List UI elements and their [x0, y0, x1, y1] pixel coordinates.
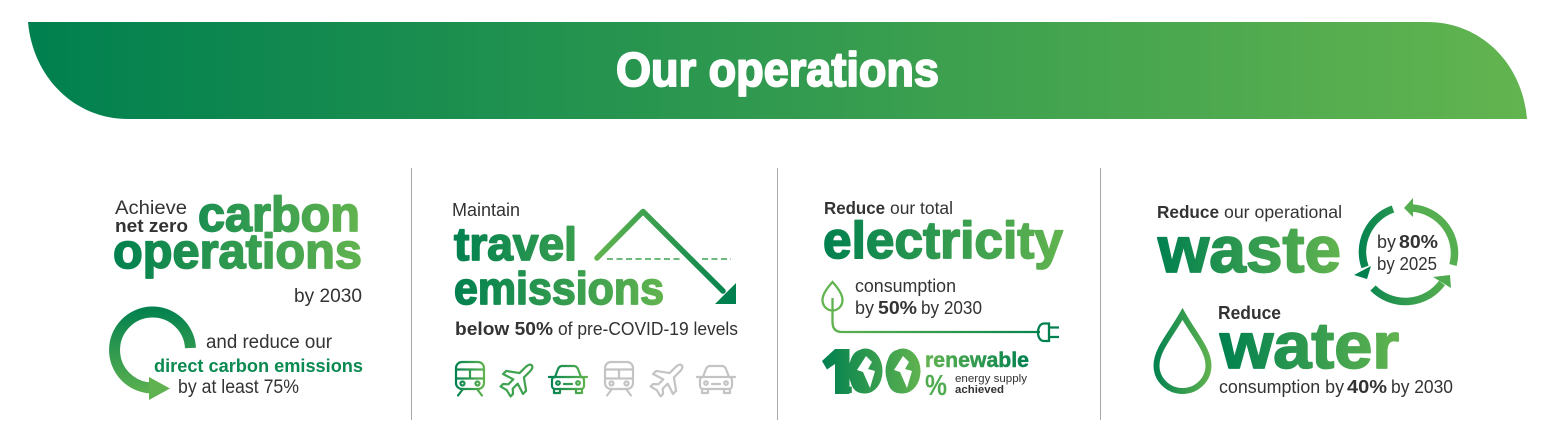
water consumption text: 40%	[1347, 376, 1387, 397]
water heading: water	[1219, 309, 1399, 382]
reduce label	[824, 198, 953, 218]
icon: plane grey	[646, 355, 692, 401]
icon: recycling arrows	[1354, 198, 1455, 302]
reduction text: by at least 75%	[178, 377, 299, 398]
percent sign: %	[925, 370, 947, 402]
reduce water label: Reduce	[1218, 303, 1281, 323]
icon: falling line arrow	[597, 212, 736, 304]
net zero label: net zero	[115, 216, 188, 236]
reduce label: our total	[890, 198, 953, 218]
header banner	[28, 22, 1527, 119]
reduction text	[154, 332, 363, 398]
energy supply text: energy supply	[955, 373, 1028, 385]
electricity heading: electricity	[823, 212, 1063, 270]
renewable label: renewable	[925, 348, 1029, 372]
reduction text: and reduce our	[206, 332, 333, 353]
title: Our operations	[616, 43, 939, 96]
icon: circular arrow	[115, 312, 190, 400]
below 50% text: below 50%	[455, 318, 553, 339]
reduction text: direct carbon emissions	[154, 355, 363, 376]
banner shape	[28, 22, 1527, 119]
icon: car grey	[697, 366, 735, 393]
energy supply text: achieved	[955, 384, 1004, 396]
travel heading: travel	[454, 218, 577, 270]
consumption text: by 2030	[921, 297, 982, 318]
consumption text: by	[855, 297, 875, 318]
water consumption text	[1219, 376, 1453, 397]
by 80% by 2025	[1377, 231, 1438, 274]
panel: carbon operations	[113, 187, 363, 400]
panel: waste and water	[1156, 198, 1455, 397]
by 80% by 2025: by	[1377, 231, 1397, 252]
carbon heading: carbon	[198, 187, 360, 242]
below 50% text: of pre-COVID-19 levels	[558, 318, 738, 339]
reduce waste label: Reduce	[1157, 202, 1219, 222]
emissions heading: emissions	[454, 263, 664, 314]
operations heading: operations	[113, 224, 362, 279]
reduce waste label: our operational	[1224, 202, 1342, 222]
maintain label: Maintain	[452, 200, 520, 220]
icon: water drop	[1156, 314, 1208, 391]
icon: car green	[549, 366, 587, 393]
water consumption text: consumption by	[1219, 376, 1345, 397]
consumption text	[855, 275, 982, 318]
100 percent figure: 100	[819, 338, 918, 407]
icon: plane green	[496, 355, 542, 401]
by 80% by 2025: by 2025	[1377, 253, 1437, 274]
reduce label: Reduce	[824, 198, 885, 218]
reduce waste label	[1157, 202, 1342, 222]
panel: electricity	[817, 198, 1063, 407]
below 50% text	[455, 318, 738, 339]
achieve label: Achieve	[115, 198, 187, 219]
icon: train green	[456, 362, 484, 396]
icon: leaf plug cable	[822, 282, 1059, 341]
consumption text: 50%	[878, 297, 917, 318]
consumption text: consumption	[855, 275, 956, 296]
waste heading: waste	[1157, 213, 1341, 286]
icon: train grey	[605, 362, 633, 396]
energy supply text	[955, 373, 1028, 396]
by 2030: by 2030	[294, 286, 362, 307]
water consumption text: by 2030	[1391, 376, 1453, 397]
panel: travel emissions	[452, 200, 738, 401]
by 80% by 2025: 80%	[1399, 231, 1438, 252]
divider	[412, 168, 1100, 420]
